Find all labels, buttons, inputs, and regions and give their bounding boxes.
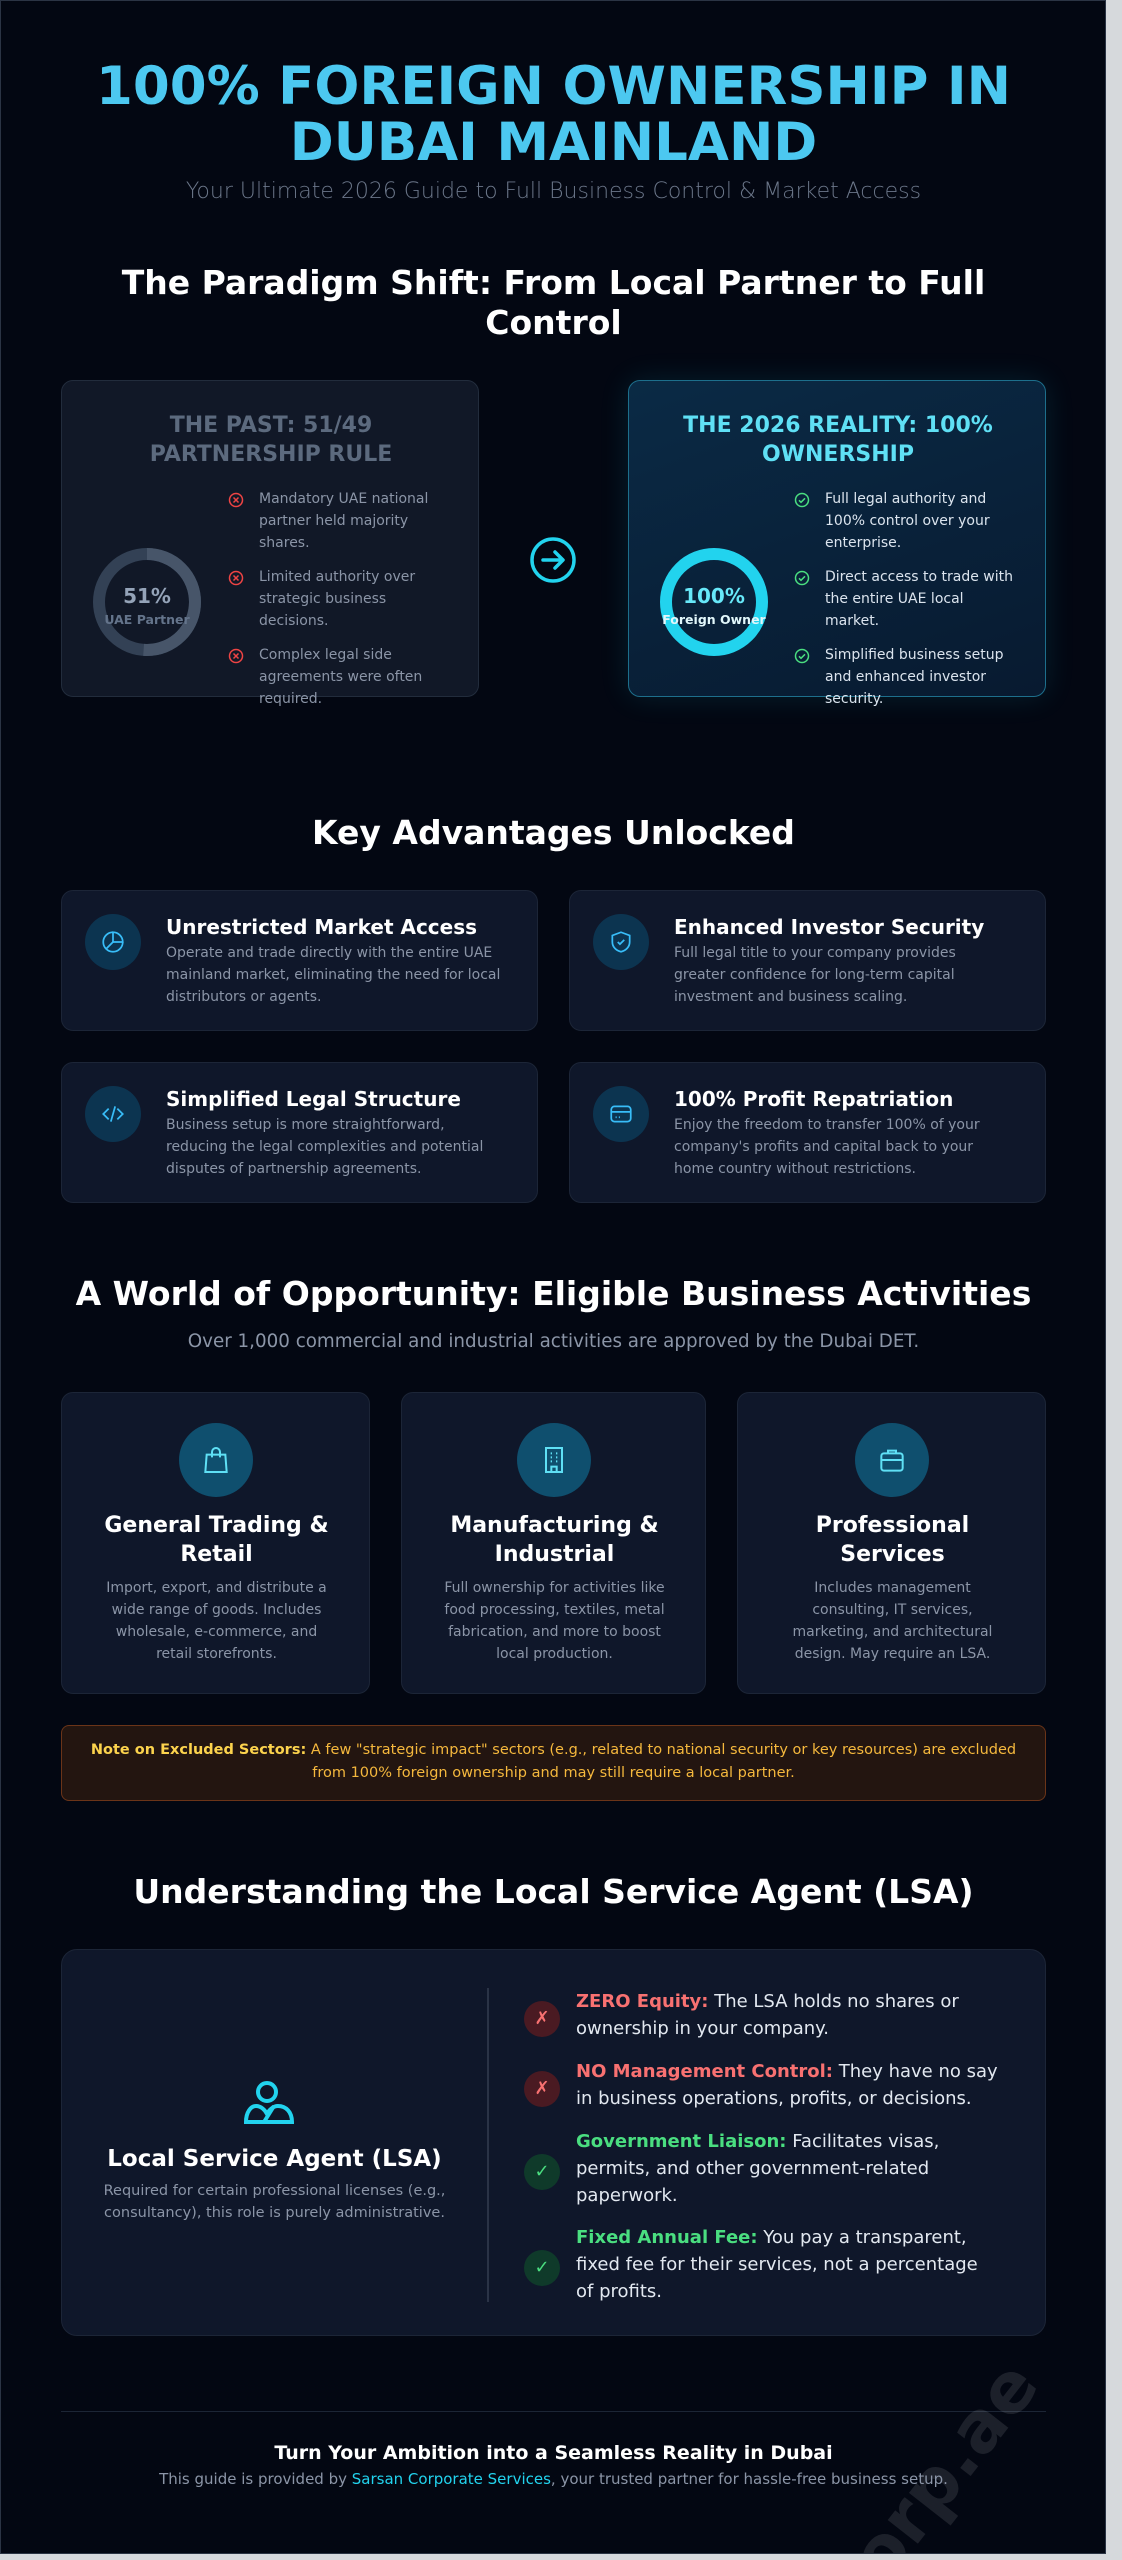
card: profit repatriation — [569, 1062, 1046, 1203]
icon: shield — [593, 914, 649, 970]
panel: the past: Complex legal side agreements were often required. — [259, 647, 422, 707]
item: zero equity: ZERO Equity: The LSA holds no shares or ownership in your company. — [576, 1991, 959, 2039]
note box: excluded sectors: Note on Excluded Sectors: A few "strategic impact" sectors (e.g., related to national security or key resources) are excluded from 100% foreign ownership and may still require a local partner. — [91, 1742, 1016, 1781]
item: government liaison: Government Liaison: Facilitates visas, permits, and other government-related paperwork. — [576, 2131, 939, 2206]
panel: the past: Limited authority over strategic business decisions. — [259, 569, 415, 629]
card: professional services: Includes management consulting, IT services, marketing, and architectural design. May require an LSA. — [793, 1580, 992, 1662]
reality heading: THE 2026 REALITY: 100% — [683, 413, 993, 438]
panel: LSA — [61, 1949, 1046, 2336]
LSA left: icon + title + desc: Required for certain professional licenses (e.g., consultancy), this role is purely administrative. — [104, 2183, 445, 2221]
card: legal structure: Business setup is more straightforward, reducing the legal complexities and potential disputes of partnership agreements. — [166, 1117, 483, 1177]
LSA items: ✗ — [534, 2078, 550, 2099]
footer: This guide is provided by Sarsan Corporate Services, your trusted partner for hassle-free business setup. — [159, 2470, 948, 2488]
heading: LSA: Understanding the Local Service Agent (LSA) — [133, 1872, 974, 1911]
heading: key advantages: Key Advantages Unlocked — [312, 813, 795, 852]
card: manufacturing: Industrial — [495, 1542, 614, 1567]
panel: 2026 reality: Direct access to trade with the entire UAE local market. — [825, 569, 1013, 629]
title: 100% FOREIGN OWNERSHIP IN — [96, 56, 1011, 117]
reality bullets — [794, 491, 1013, 707]
heading: paradigm shift — [122, 263, 985, 342]
footer: Turn Your Ambition into a Seamless Reality in Dubai — [274, 2442, 833, 2464]
donut: 100% — [660, 548, 768, 656]
card: professional services: Professional — [816, 1513, 969, 1538]
card: general trading: Import, export, and distribute a wide range of goods. Includes wholesale, e-commerce, and retail storefronts. — [106, 1580, 327, 1662]
panel: 2026 reality — [628, 380, 1046, 697]
card: general trading — [61, 1392, 370, 1694]
icon: briefcase — [855, 1423, 929, 1497]
card: profit repatriation: 100% Profit Repatriation — [674, 1087, 953, 1111]
card: investor security — [569, 890, 1046, 1031]
icon: bag — [179, 1423, 253, 1497]
subtitle: Your Ultimate 2026 Guide to Full Business Control & Market Access — [186, 179, 921, 204]
note box: excluded sectors — [61, 1725, 1046, 1801]
card: profit repatriation: Enjoy the freedom to transfer 100% of your company's profits and capital back to your home country without restrictions. — [674, 1117, 980, 1177]
icon: building — [517, 1423, 591, 1497]
item: fixed fee: Fixed Annual Fee: You pay a transparent, fixed fee for their services, not a percentage of profits. — [576, 2227, 978, 2302]
card: manufacturing: Full ownership for activities like food processing, textiles, metal fabrication, and more to boost local production. — [444, 1580, 665, 1662]
card: general trading: Retail — [180, 1542, 253, 1567]
panel: 2026 reality: Full legal authority and 100% control over your enterprise. — [825, 491, 990, 551]
past heading — [150, 413, 392, 467]
card: market access: Unrestricted Market Access — [166, 915, 477, 939]
LSA items: ✓ — [534, 2161, 550, 2182]
heading: world of opportunity: A World of Opportunity: Eligible Business Activities — [76, 1274, 1031, 1313]
reality heading: OWNERSHIP — [762, 442, 914, 467]
donut: 51% — [93, 548, 201, 656]
card: market access: Operate and trade directly with the entire UAE mainland market, eliminating the need for local distributors or agents. — [166, 945, 500, 1005]
panel: the past — [61, 380, 479, 697]
panel: 2026 reality: Simplified business setup and enhanced investor security. — [825, 647, 1003, 707]
subheading: Over 1,000 commercial and industrial activities are approved by the Dubai DET. — [188, 1331, 919, 1352]
LSA items: ✗ — [534, 2008, 550, 2029]
card: manufacturing — [401, 1392, 706, 1694]
donut: 51%: UAE Partner — [104, 612, 190, 627]
card: professional services — [737, 1392, 1046, 1694]
donut: 100%: 100% — [683, 584, 745, 608]
icon: card — [593, 1086, 649, 1142]
card: general trading: General Trading & — [104, 1513, 329, 1538]
heading: paradigm shift: The Paradigm Shift: From Local Partner to Full — [122, 263, 985, 302]
heading: paradigm shift: Control — [485, 303, 622, 342]
past heading: PARTNERSHIP RULE — [150, 442, 392, 467]
card: manufacturing: Manufacturing & — [450, 1513, 659, 1538]
icon: pie — [85, 914, 141, 970]
icon: agent — [244, 2081, 294, 2124]
LSA items: ✓ — [534, 2257, 550, 2278]
card: professional services: Services — [840, 1542, 945, 1567]
item: no management: NO Management Control: They have no say in business operations, profits, or decisions. — [576, 2061, 998, 2109]
panel: the past: Mandatory UAE national partner held majority shares. — [259, 491, 428, 551]
LSA left: icon + title + desc: Local Service Agent (LSA) — [107, 2146, 442, 2172]
card: investor security: Full legal title to your company provides greater confidence for long-term capital investment and business scaling. — [674, 945, 956, 1005]
past heading: THE PAST: 51/49 — [170, 413, 372, 438]
card: legal structure: Simplified Legal Structure — [166, 1087, 461, 1111]
arrow icon — [530, 537, 576, 583]
title — [96, 56, 1011, 173]
card: legal structure — [61, 1062, 538, 1203]
LSA items — [487, 1988, 1027, 2302]
donut: 51%: 51% — [123, 584, 171, 608]
footer — [159, 2442, 948, 2488]
icon: code — [85, 1086, 141, 1142]
card: market access — [61, 890, 538, 1031]
reality heading — [683, 413, 993, 467]
card: investor security: Enhanced Investor Security — [674, 915, 984, 939]
past bullets — [228, 491, 428, 707]
donut: 100%: Foreign Owner — [662, 612, 767, 627]
LSA left: icon + title + desc — [104, 2081, 445, 2221]
title: DUBAI MAINLAND — [290, 112, 817, 173]
